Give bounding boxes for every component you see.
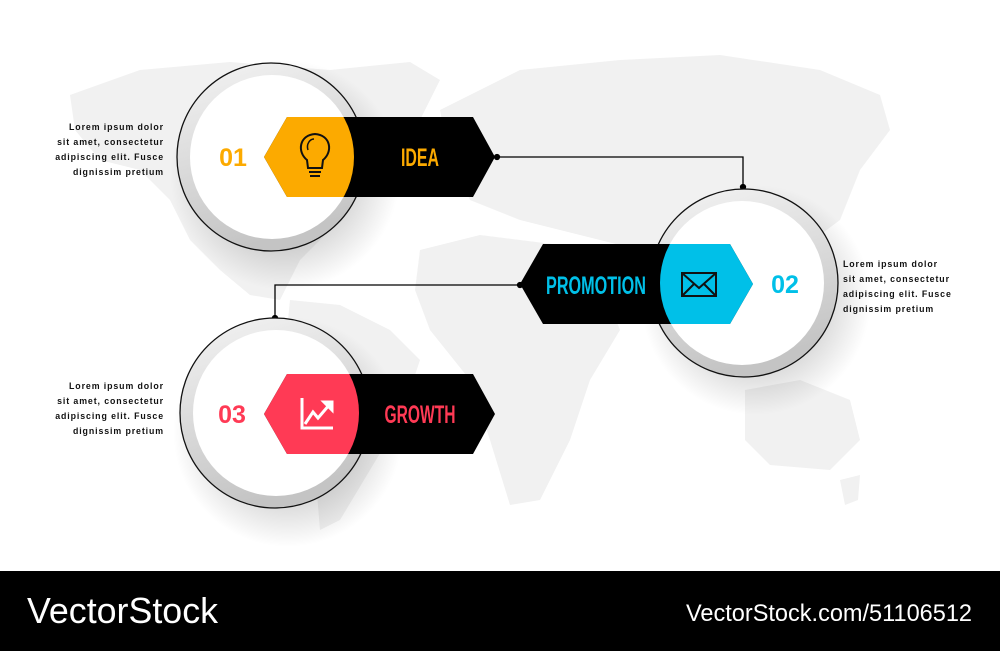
text block 1: adipiscing elit. Fusce <box>55 152 164 162</box>
step 03 banner: GROWTH <box>384 401 456 429</box>
text block 2: adipiscing elit. Fusce <box>843 289 952 299</box>
text block 3: sit amet, consectetur <box>57 396 164 406</box>
step 02 circle <box>641 185 871 415</box>
icon: growth chart <box>302 398 333 428</box>
footer bar: VectorStock.com/51106512 <box>686 600 972 627</box>
world map background <box>70 55 890 530</box>
step 03 circle <box>173 317 403 547</box>
step 01 circle <box>170 60 400 290</box>
footer bar <box>0 571 1000 651</box>
step 01 banner: IDEA <box>401 144 439 172</box>
number 01: 01 <box>219 144 247 172</box>
number 03: 03 <box>218 401 246 429</box>
text block 2: sit amet, consectetur <box>843 274 950 284</box>
connector: promotion to growth <box>272 282 522 320</box>
step 03 banner <box>264 374 495 454</box>
icon: light bulb <box>301 134 329 176</box>
text block 2 <box>843 259 952 314</box>
text block 3: Lorem ipsum dolor <box>69 381 164 391</box>
text block 3: dignissim pretium <box>73 426 164 436</box>
connector: idea to promotion <box>494 154 746 190</box>
text block 1: dignissim pretium <box>73 167 164 177</box>
text block 1 <box>55 122 164 177</box>
text block 1: Lorem ipsum dolor <box>69 122 164 132</box>
number 02: 02 <box>771 271 799 299</box>
text block 2: Lorem ipsum dolor <box>843 259 938 269</box>
step 01 banner <box>264 117 495 197</box>
step 02 banner: PROMOTION <box>546 272 646 300</box>
text block 3: adipiscing elit. Fusce <box>55 411 164 421</box>
step 02 banner <box>520 244 753 324</box>
text block 1: sit amet, consectetur <box>57 137 164 147</box>
text block 2: dignissim pretium <box>843 304 934 314</box>
text block 3 <box>55 381 164 436</box>
footer bar: VectorStock <box>27 590 219 631</box>
icon: envelope <box>682 273 716 296</box>
